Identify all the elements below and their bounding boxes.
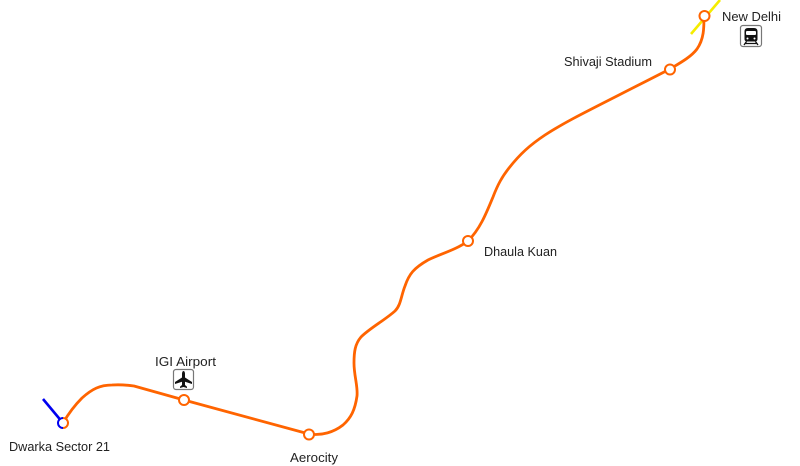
station: IGI Airport: IGI Airport: [155, 354, 216, 369]
station: New Delhi: New Delhi: [722, 9, 781, 24]
station: Dhaula Kuan: [463, 236, 557, 259]
station: Shivaji Stadium: Shivaji Stadium: [564, 54, 652, 69]
orange airport express route: [63, 16, 704, 435]
station: IGI Airport: [155, 354, 216, 405]
station: Shivaji Stadium: [564, 54, 675, 74]
blue connecting line: [43, 399, 63, 423]
station: Dwarka Sector 21: Dwarka Sector 21: [9, 439, 110, 454]
station: Dwarka Sector 21: [9, 418, 110, 454]
icon: airplane: [174, 370, 194, 390]
station: Aerocity: Aerocity: [290, 450, 339, 465]
station: Aerocity: [290, 430, 339, 465]
icon: train: [740, 26, 762, 46]
yellow connecting line: [691, 0, 720, 34]
station: Dhaula Kuan: Dhaula Kuan: [484, 244, 557, 259]
